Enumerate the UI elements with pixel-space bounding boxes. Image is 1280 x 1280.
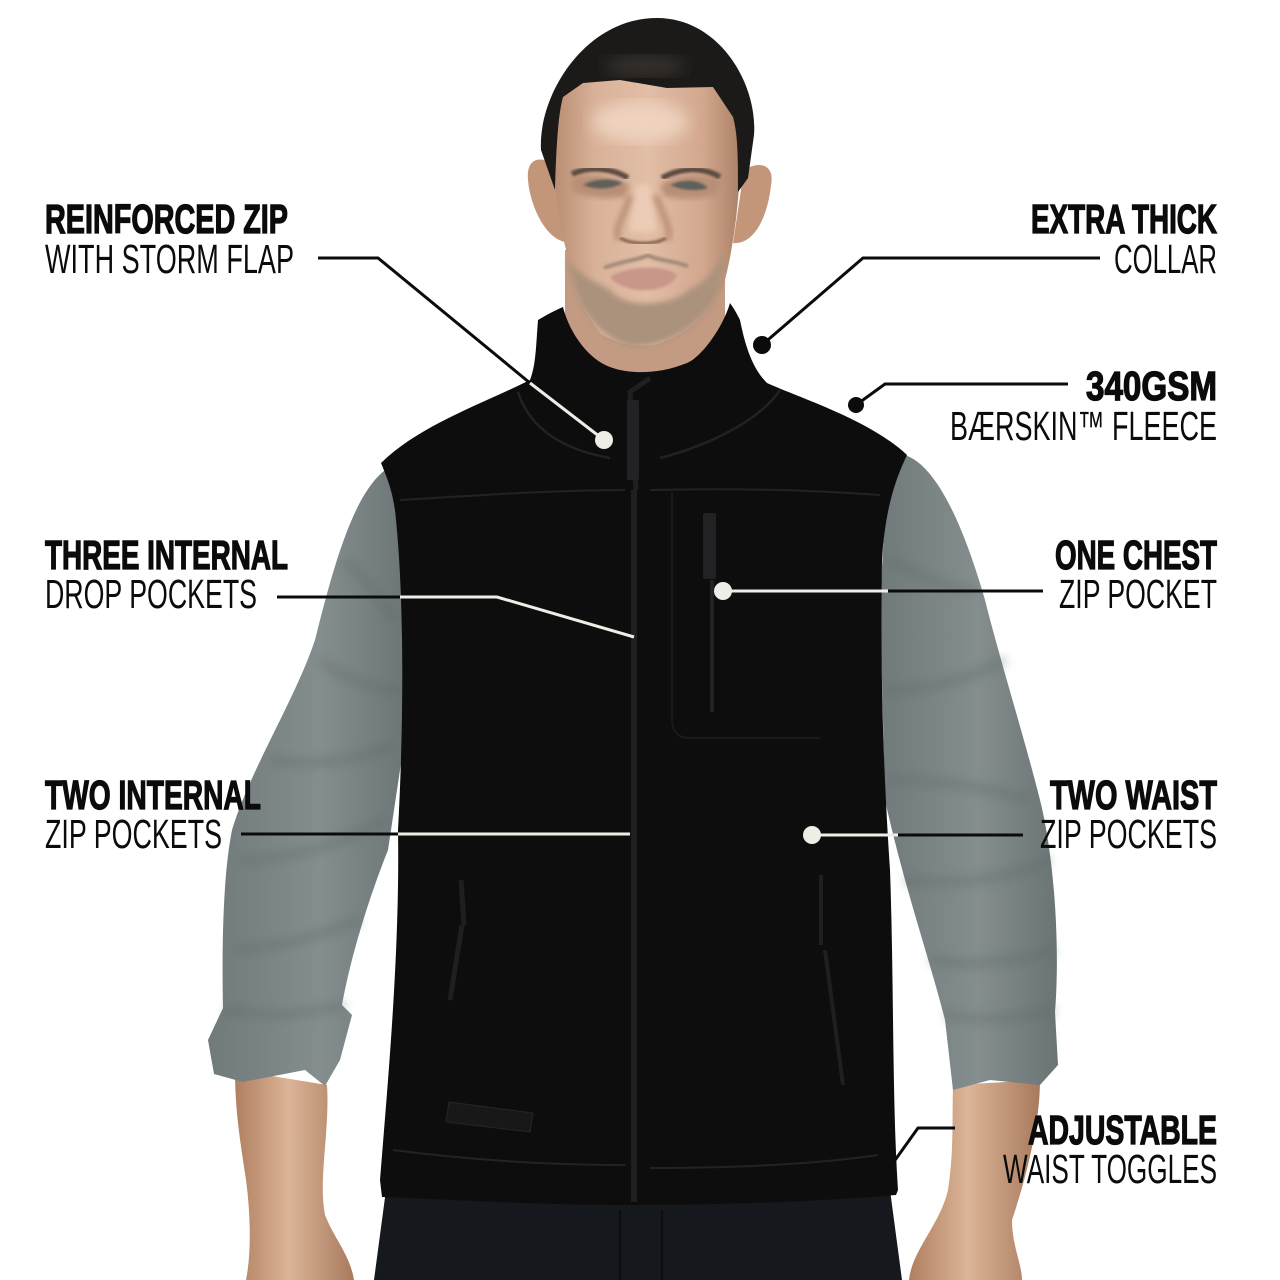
- vest body: [380, 303, 907, 1205]
- neck: [565, 250, 725, 380]
- right shirt sleeve: [880, 455, 1058, 1090]
- hair: [541, 18, 754, 192]
- collar zipper: [630, 378, 650, 490]
- callout: extra thick collar: COLLAR: [1114, 236, 1217, 282]
- moustache shadow: [604, 255, 688, 268]
- nose side shadows: [617, 195, 669, 240]
- ears: [528, 160, 565, 242]
- right waist pocket zip: [821, 875, 843, 1085]
- callout: one chest zip pocket: [714, 532, 1217, 617]
- chest yoke seam: [400, 489, 880, 500]
- right forearm and hand: [909, 1080, 1040, 1280]
- callout: two internal zip pockets: ZIP POCKETS: [45, 811, 222, 857]
- callout: reinforced zip: WITH STORM FLAP: [45, 236, 294, 282]
- left forearm and hand: [235, 1070, 354, 1280]
- callout: reinforced zip: [45, 196, 613, 449]
- hem seam: [393, 1150, 878, 1168]
- callout: two internal zip pockets: TWO INTERNAL: [45, 772, 261, 818]
- main zipper: [631, 490, 637, 1202]
- callout: two internal zip pockets: [45, 772, 630, 857]
- eyes: [583, 179, 708, 190]
- collar zip pull: [627, 400, 639, 480]
- chest pocket zip: [710, 580, 714, 712]
- forehead highlight: [592, 102, 688, 142]
- mouth: [610, 268, 677, 290]
- nose bridge highlight: [630, 185, 656, 232]
- callout: two waist zip pockets: TWO WAIST: [1050, 772, 1217, 818]
- eye socket shadow: [572, 175, 722, 199]
- eyebrows: [572, 169, 720, 178]
- face shading: [572, 102, 722, 240]
- callout: extra thick collar: [753, 196, 1217, 354]
- man figure wearing fleece vest: [208, 18, 1058, 1280]
- face: [554, 68, 740, 346]
- right sleeve wrinkles: [885, 560, 1055, 1019]
- chest zip pull: [703, 513, 716, 579]
- left waist pocket zip: [450, 880, 464, 1000]
- logo patch: [446, 1102, 533, 1132]
- callout: adjustable waist toggles: [888, 1107, 1217, 1192]
- collar fold seam: [518, 390, 780, 458]
- left shirt sleeve: [208, 468, 412, 1086]
- stubble: [567, 250, 725, 347]
- callout: three internal drop pockets: THREE INTERNAL: [45, 532, 288, 578]
- trousers: [374, 1190, 902, 1280]
- callout: 340gsm fleece: 340GSM: [1086, 363, 1217, 409]
- callout: three internal drop pockets: [45, 532, 634, 637]
- trouser fly seam: [620, 1210, 662, 1280]
- callout: reinforced zip: REINFORCED ZIP: [45, 196, 288, 242]
- chest panel seams: [672, 492, 820, 738]
- nose shadow: [620, 238, 666, 243]
- callout: three internal drop pockets: DROP POCKETS: [45, 571, 257, 617]
- left sleeve wrinkles: [225, 560, 405, 1014]
- hair top lighter patch: [605, 56, 685, 76]
- callout: 340gsm fleece: [848, 363, 1217, 449]
- callout: two waist zip pockets: [803, 772, 1217, 857]
